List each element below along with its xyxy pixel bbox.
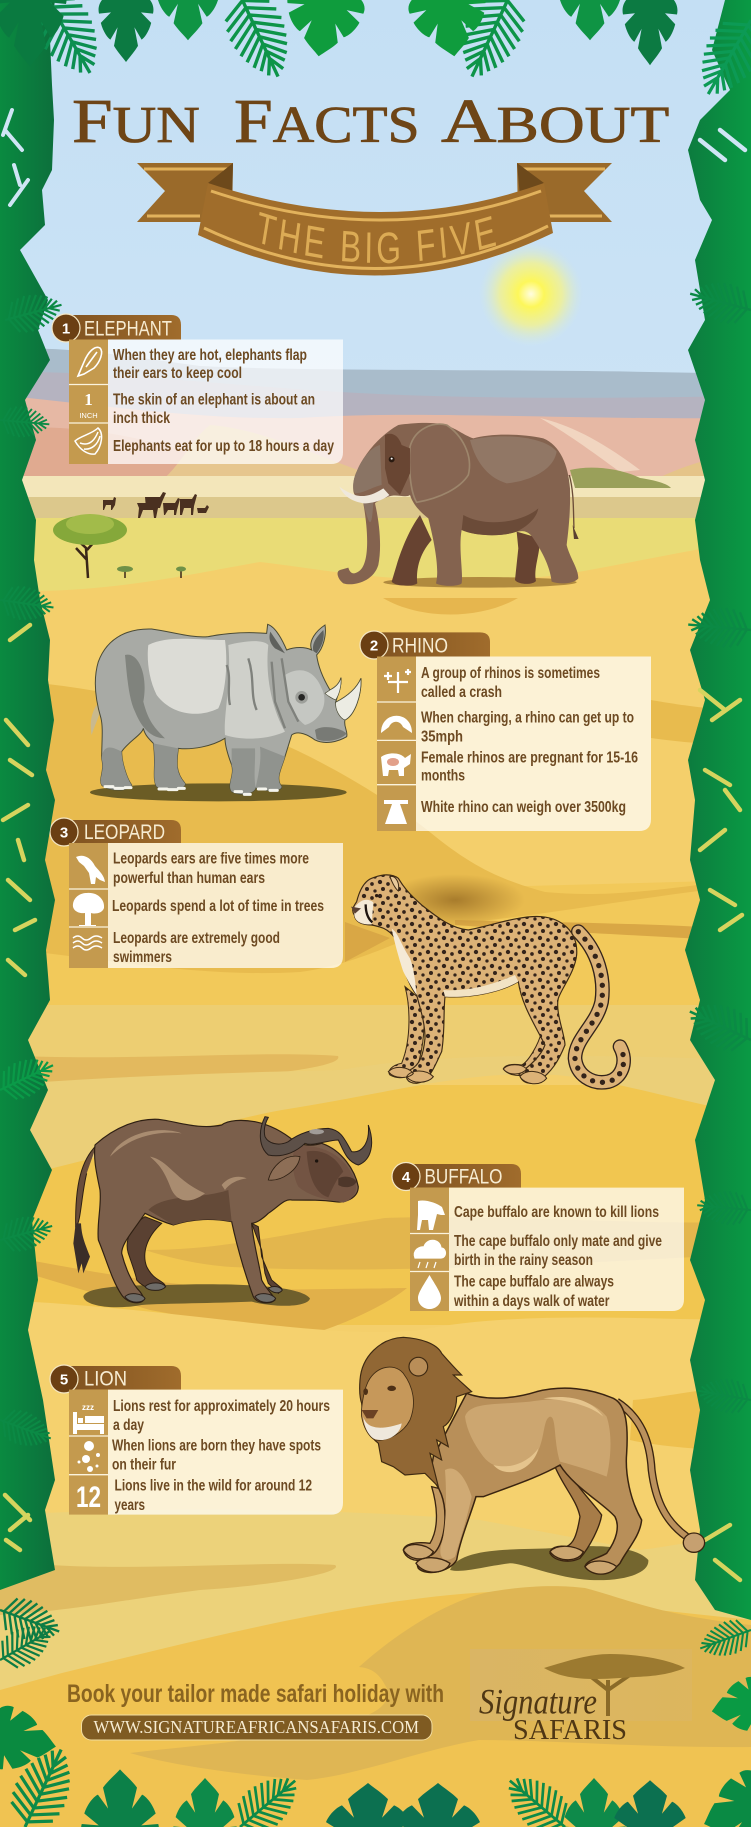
fact text: swimmers: [113, 949, 172, 966]
panel: elephant: [52, 314, 343, 464]
fact text: Leopards are extremely good: [113, 930, 280, 947]
background: sky: [0, 0, 751, 600]
heading: 1 elephant: ELEPHANT: [84, 318, 172, 341]
logo: Signature Safaris: [470, 1649, 692, 1746]
fact text: White rhino can weigh over 3500kg: [421, 799, 626, 816]
fact text: Leopards spend a lot of time in trees: [112, 898, 324, 915]
fact text: years: [114, 1497, 145, 1514]
icon: bed: [73, 1403, 104, 1434]
icon column: [69, 843, 108, 968]
heading: 2 rhino: 2: [370, 638, 378, 654]
fact text: [112, 1398, 330, 1514]
fact text: within a days walk of water: [453, 1293, 610, 1310]
rhino: [90, 624, 361, 801]
foliage: top canopy: [0, 0, 677, 88]
logo: Signature Safaris: SAFARIS: [513, 1714, 627, 1746]
banner: The Big Five: [137, 163, 612, 276]
fact text: Female rhinos are pregnant for 15-16: [421, 750, 638, 766]
icon: plus signs: [384, 669, 411, 693]
heading: 2 rhino: [360, 631, 490, 659]
fact card: [108, 1390, 343, 1515]
heading: 5 lion: LION: [84, 1368, 127, 1391]
buffalo horns: [260, 1117, 372, 1165]
icon: buffalo: [417, 1200, 445, 1230]
fact text: The cape buffalo are always: [454, 1274, 614, 1291]
leopard: [351, 875, 624, 1084]
banner: The Big Five: THE BIG FIVE: [259, 212, 496, 264]
lion: [360, 1337, 705, 1580]
title: FACTS: [234, 87, 420, 156]
icon: spots: [78, 1441, 100, 1472]
fact text: [113, 347, 334, 455]
logo: Signature Safaris: Signature: [479, 1682, 597, 1722]
icon: one inch: INCH: [79, 411, 98, 420]
background: distant hills: [0, 349, 751, 608]
fact text: When they are hot, elephants flap: [113, 347, 307, 364]
fact text: When lions are born they have spots: [112, 1438, 321, 1455]
lion tail tuft: [683, 1533, 705, 1552]
foliage: palm fronds right: [681, 7, 751, 1664]
heading: 1 elephant: [52, 314, 181, 342]
fact text: Elephants eat for up to 18 hours a day: [113, 438, 334, 455]
elephant: [338, 423, 579, 588]
fact text: months: [421, 768, 465, 785]
fact text: Leopards ears are five times more: [113, 851, 309, 868]
icon: tree: [73, 893, 104, 926]
landscape: antelope herd: [103, 492, 209, 518]
landscape: acacia tree: [53, 514, 186, 578]
foliage: palm fronds left: [0, 287, 66, 1676]
border: left foliage: [0, 0, 62, 1778]
foliage: bottom row: [1, 1738, 689, 1827]
footer call to action: Book your tailor made safari holiday with: [67, 1680, 444, 1708]
fact text: on their fur: [112, 1457, 176, 1474]
background: distant bush: [570, 468, 671, 488]
fact card: [449, 1188, 684, 1311]
background: sand dunes: [0, 540, 751, 1827]
fact text: [453, 1204, 662, 1310]
website pill: WWW.SIGNATUREAFRICANSAFARIS.COM: [94, 1717, 419, 1737]
icon: bananas: [75, 428, 102, 454]
heading: 5 lion: [50, 1365, 181, 1393]
heading: 4 buffalo: [392, 1162, 521, 1190]
title: [72, 86, 669, 156]
icon: bed: zzz: [82, 1403, 94, 1412]
fact text: called a crash: [421, 684, 502, 701]
fact text: The skin of an elephant is about an: [113, 392, 315, 408]
icon column: [410, 1188, 449, 1311]
icon: water drop: [418, 1275, 441, 1309]
icon column: [69, 1390, 108, 1515]
icon: ear: [78, 347, 102, 376]
fact text: 35mph: [421, 729, 463, 746]
heading: 3 leopard: [50, 818, 181, 846]
title: FUN: [72, 86, 200, 156]
fact text: Cape buffalo are known to kill lions: [454, 1204, 659, 1221]
icon: one inch: 1: [84, 390, 93, 409]
heading: 1 elephant: 1: [62, 320, 70, 338]
icon: scale: [384, 800, 408, 824]
icon: pregnant rhino: [381, 753, 411, 776]
icon: number 12: 12: [76, 1480, 101, 1514]
panel: buffalo: [392, 1162, 684, 1311]
fact text: a day: [113, 1417, 144, 1434]
panel: rhino: [360, 631, 651, 831]
fact text: When charging, a rhino can get up to: [421, 710, 634, 727]
icon column: [69, 340, 108, 464]
elephant tusk: [339, 487, 389, 503]
heading: 4 buffalo: 4: [402, 1169, 411, 1186]
icon column: [377, 656, 416, 831]
sun: [479, 242, 583, 346]
icon: speedometer: [381, 716, 412, 733]
heading: 4 buffalo: BUFFALO: [424, 1166, 502, 1189]
fact text: birth in the rainy season: [454, 1252, 593, 1269]
heading: 3 leopard: 3: [60, 824, 68, 842]
icon: waves: [73, 936, 102, 950]
lion mane: [360, 1337, 472, 1487]
border: right foliage: [685, 0, 751, 1827]
fact text: The cape buffalo only mate and give: [454, 1233, 662, 1250]
panel: lion: [50, 1365, 343, 1515]
title: ABOUT: [441, 86, 669, 156]
fact text: their ears to keep cool: [113, 365, 242, 382]
fact text: inch thick: [113, 410, 170, 427]
heading: 3 leopard: LEOPARD: [84, 821, 165, 844]
heading: 2 rhino: RHINO: [392, 635, 448, 658]
panel: leopard: [50, 818, 343, 968]
icon: rain cloud: [414, 1240, 446, 1268]
heading: 5 lion: 5: [60, 1372, 68, 1388]
buffalo: [73, 1117, 372, 1307]
fact card: [108, 340, 343, 464]
fact text: Lions live in the wild for around 12: [114, 1478, 312, 1495]
fact text: powerful than human ears: [113, 870, 265, 887]
icon: cat: [76, 856, 105, 884]
fact text: A group of rhinos is sometimes: [421, 665, 600, 682]
icon: one inch: [79, 390, 98, 420]
fact card: [416, 656, 651, 831]
fact text: [421, 665, 638, 816]
fact text: Lions rest for approximately 20 hours: [113, 1398, 330, 1415]
fact card: [108, 843, 343, 968]
fact text: [112, 851, 324, 966]
